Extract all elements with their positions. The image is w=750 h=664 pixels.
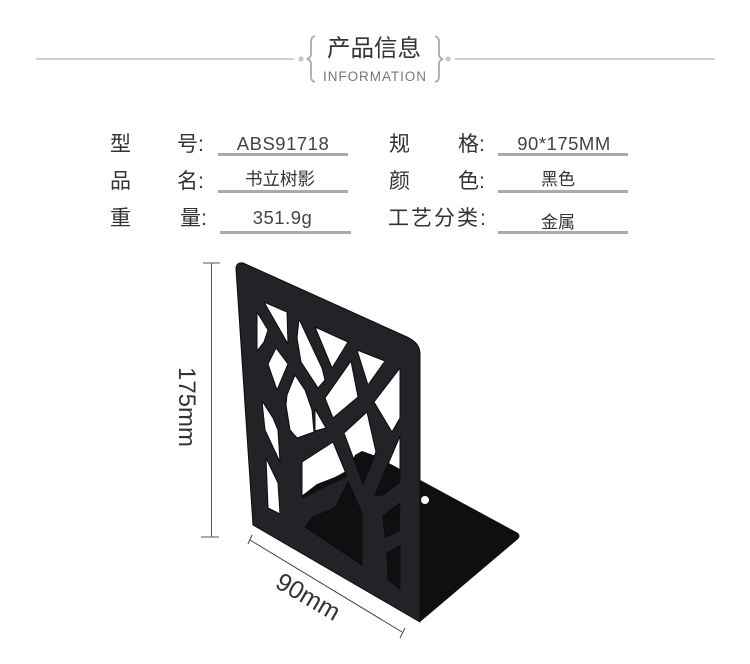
bookend upright plate with tree cutouts bbox=[236, 263, 420, 622]
title: 产品信息 bbox=[327, 35, 421, 61]
row 3 left: 351.9g bbox=[253, 207, 312, 228]
header rule left bbox=[36, 58, 294, 60]
spec table bbox=[110, 133, 628, 234]
horizontal dimension line bbox=[248, 535, 405, 638]
row 1 right: 规 bbox=[389, 133, 410, 156]
row 1 right: 90*175MM bbox=[517, 133, 611, 154]
row 2 left: 名: bbox=[177, 170, 204, 193]
header bbox=[36, 35, 715, 84]
row 1 left: 型 bbox=[110, 133, 131, 156]
row 2 left: 品 bbox=[110, 170, 131, 193]
subtitle: INFORMATION bbox=[323, 69, 427, 84]
horizontal dimension label: 90mm bbox=[271, 568, 345, 627]
row 1 right bbox=[389, 133, 628, 156]
row 3 right bbox=[388, 207, 628, 234]
row 3 left: 量: bbox=[180, 207, 207, 230]
row 2 right: 色: bbox=[458, 170, 485, 193]
header rule right bbox=[455, 58, 715, 60]
row 2 right: 颜 bbox=[389, 170, 410, 193]
bookend base bbox=[300, 451, 520, 622]
row 3 left: 重 bbox=[110, 207, 131, 230]
vertical dimension label: 175mm bbox=[173, 367, 200, 447]
row 3 right: 金属 bbox=[541, 213, 575, 232]
vertical dimension line bbox=[201, 263, 220, 537]
row 1 left: ABS91718 bbox=[237, 133, 329, 154]
row 2 left: 书立树影 bbox=[245, 169, 315, 189]
row 1 left bbox=[110, 133, 348, 156]
row 3 right: 工艺分类: bbox=[388, 207, 488, 230]
row 2 right: 黑色 bbox=[541, 170, 575, 189]
row 2 right bbox=[389, 170, 628, 193]
row 2 left bbox=[110, 169, 348, 193]
header braces and dots bbox=[298, 35, 450, 83]
row 1 right: 格: bbox=[458, 133, 485, 156]
row 3 left bbox=[110, 207, 351, 234]
row 1 left: 号: bbox=[177, 133, 204, 156]
